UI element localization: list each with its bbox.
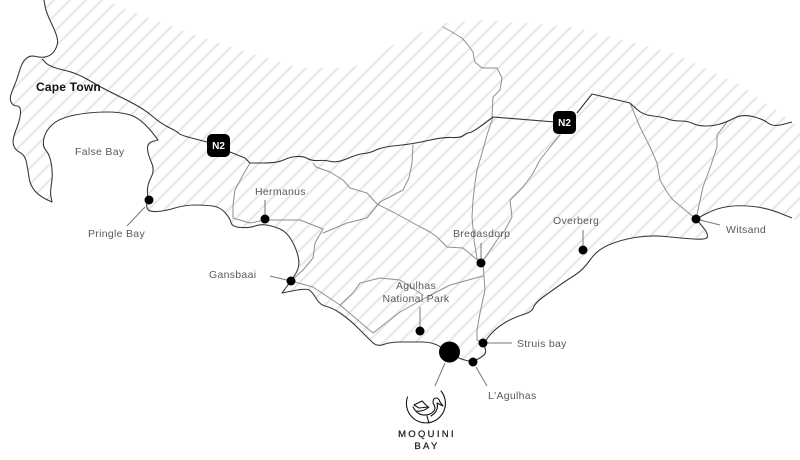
label: False Bay: False Bay <box>75 146 125 158</box>
logo icon: bird in circle <box>406 391 445 423</box>
logo sub-wordmark: BAY <box>414 441 440 452</box>
coastline <box>10 0 792 361</box>
label: Agulhas National Park: Agulhas <box>396 280 436 292</box>
label: L'Agulhas: L'Agulhas <box>488 390 536 402</box>
label: Overberg: Overberg <box>553 215 599 227</box>
Moquini Bay logo <box>398 391 456 452</box>
logo wordmark: MOQUINI <box>398 429 456 440</box>
N2 badge east <box>553 111 576 134</box>
label: Hermanus: Hermanus <box>255 186 306 198</box>
label: Struis bay: Struis bay <box>517 338 567 350</box>
hatched land area <box>12 0 800 360</box>
N2 highway <box>42 59 792 163</box>
label: Witsand: Witsand <box>726 224 766 236</box>
label: Cape Town: Cape Town <box>36 80 101 94</box>
leader lines <box>127 200 720 386</box>
label: Pringle Bay: Pringle Bay <box>88 228 145 240</box>
N2 badge west <box>207 134 230 157</box>
location dots <box>144 196 700 366</box>
N2 badge west: N2 <box>212 141 225 152</box>
label: Gansbaai: Gansbaai <box>209 269 256 281</box>
label: Agulhas National Park: National Park <box>383 293 450 305</box>
label: Bredasdorp: Bredasdorp <box>453 228 510 240</box>
minor roads <box>233 27 727 343</box>
N2 badge east: N2 <box>558 118 571 129</box>
